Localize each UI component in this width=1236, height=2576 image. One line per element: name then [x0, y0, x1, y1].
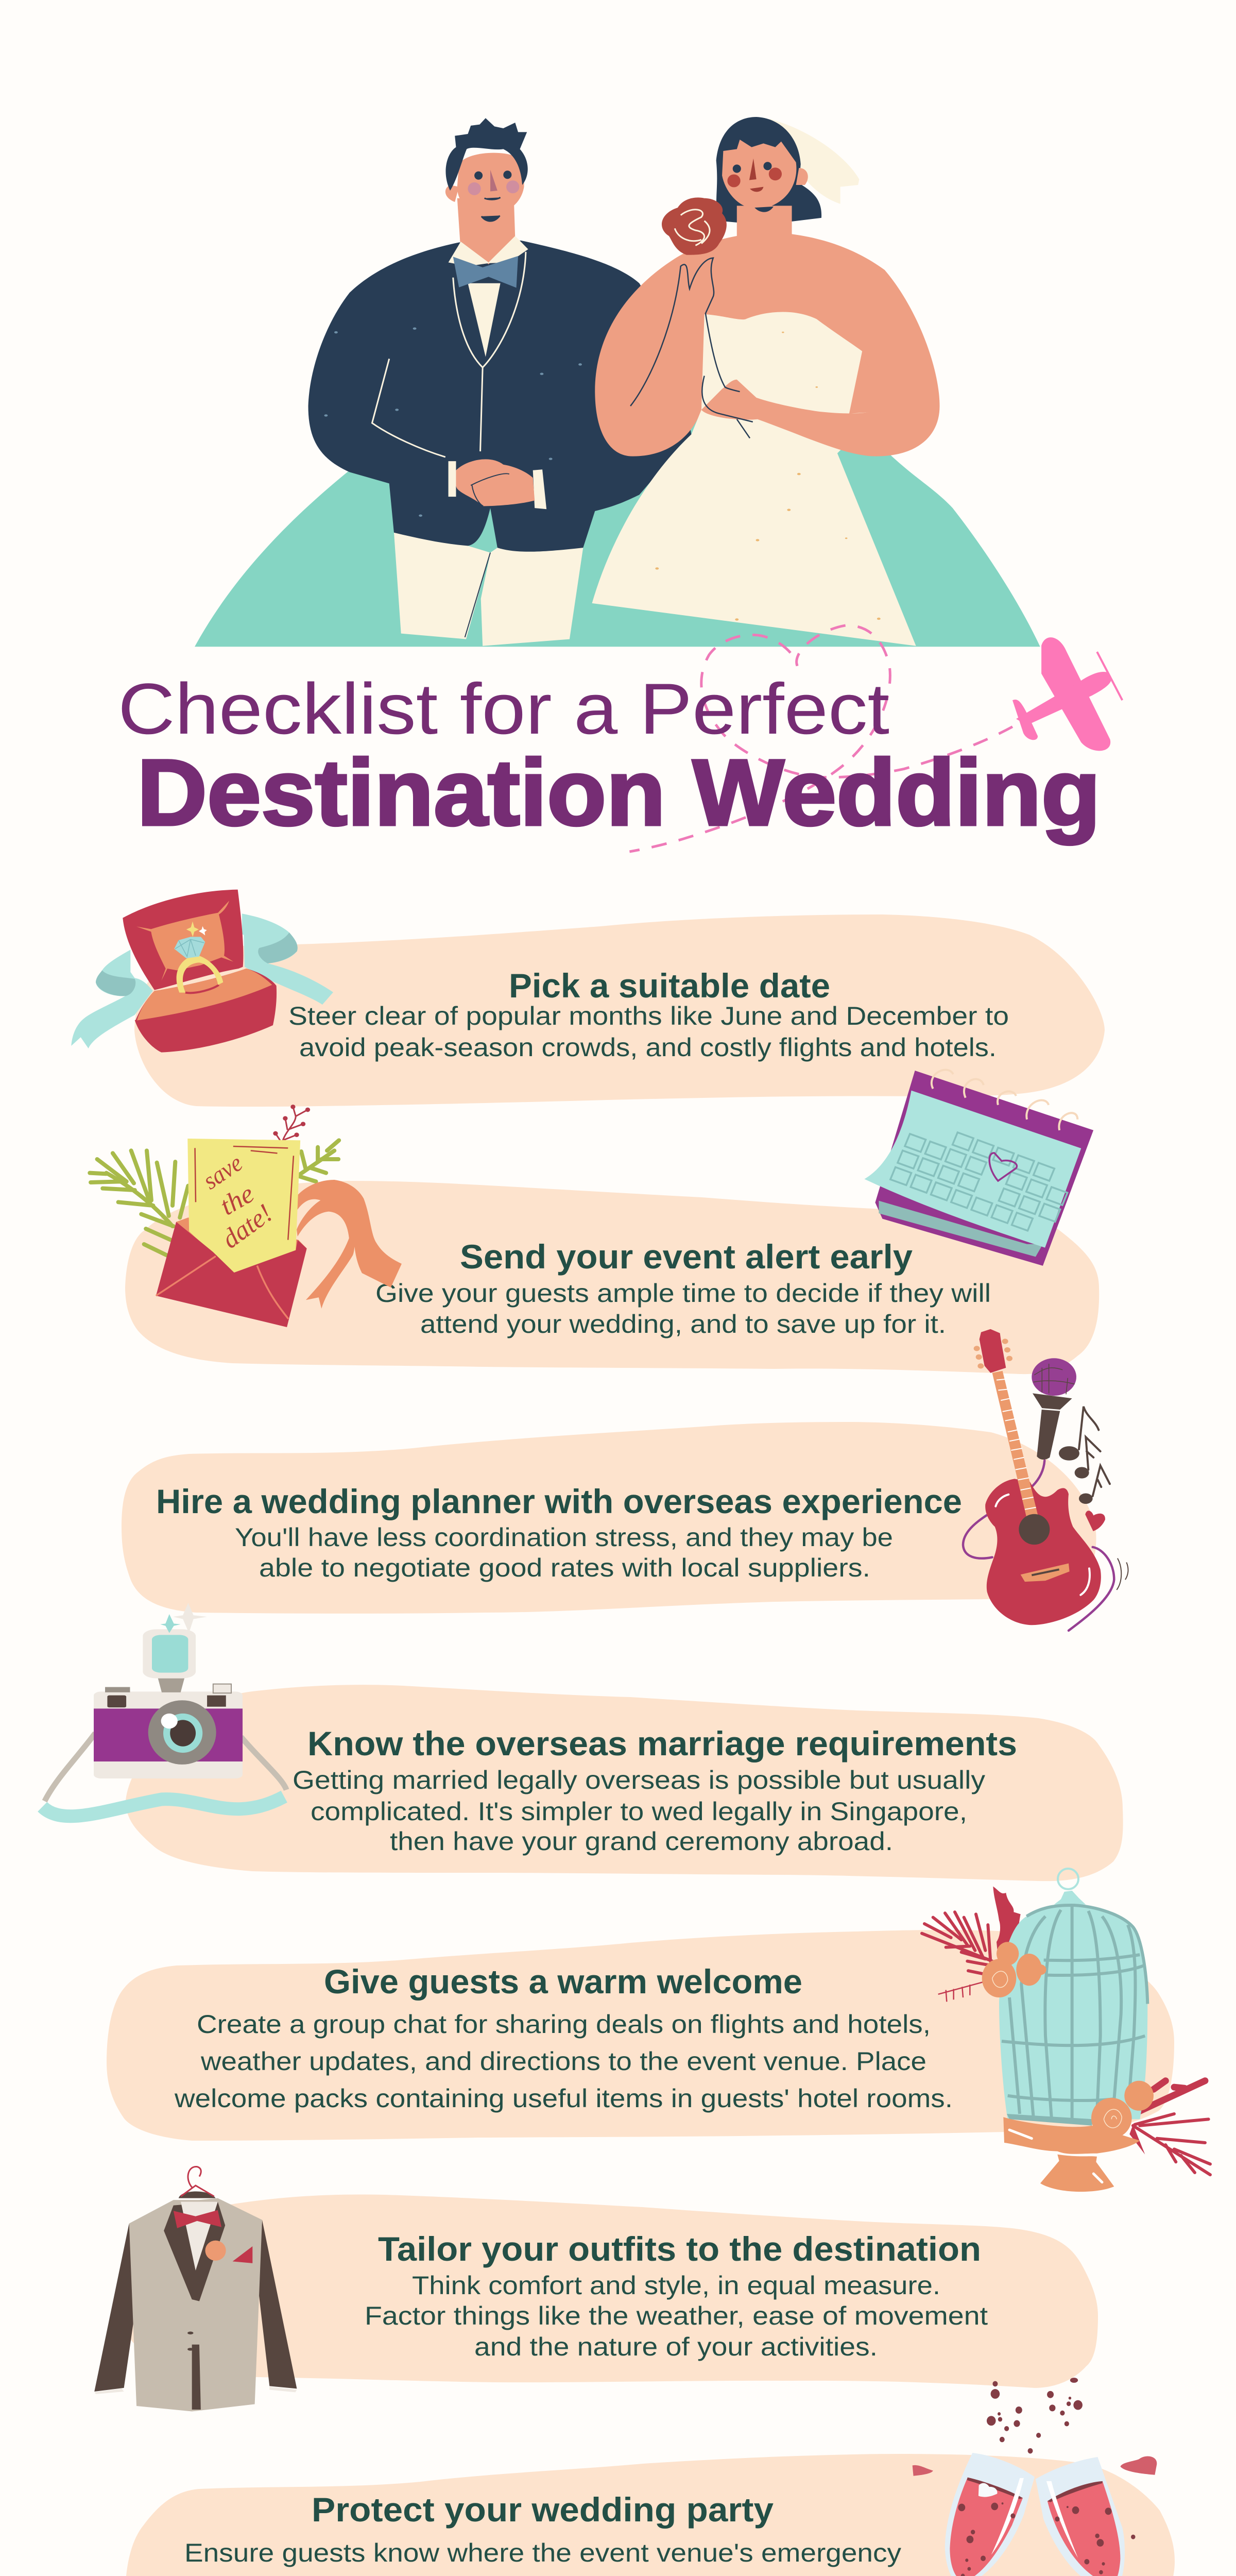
- save the date text: the: [215, 1179, 259, 1221]
- icon: birdcage: [922, 1869, 1210, 2192]
- panel: know the overseas marriage requirements: [126, 1685, 1123, 1881]
- panel: know the overseas marriage requirements: then have your grand ceremony abroad.: [390, 1827, 893, 1856]
- panel: pick a suitable date: avoid peak-season crowds, and costly flights and hotels.: [299, 1033, 997, 1062]
- icon: pink airplane: [1012, 637, 1122, 751]
- save the date text: save: [198, 1149, 247, 1195]
- panel: send your event alert early: attend your wedding, and to save up for it.: [420, 1310, 946, 1338]
- panel: hire a wedding planner: [122, 1422, 1096, 1614]
- panel: send your event alert early: Give your guests ample time to decide if they will: [375, 1279, 991, 1308]
- panel: give guests a warm welcome: [107, 1930, 1174, 2141]
- envelope: [156, 1222, 307, 1327]
- pedestal: [1003, 2117, 1140, 2154]
- save the date text: date!: [217, 1198, 278, 1255]
- illustration: bride and groom: [195, 117, 1040, 647]
- panel: protect your wedding party: Protect your wedding party: [312, 2490, 774, 2529]
- panel: pick a suitable date: Steer clear of popular months like June and December to: [288, 1002, 1009, 1030]
- panel: know the overseas marriage requirements: Getting married legally overseas is possible but usually: [293, 1766, 985, 1794]
- title line 2: Destination Wedding: [137, 740, 1101, 845]
- panel: know the overseas marriage requirements: Know the overseas marriage requirements: [307, 1724, 1017, 1762]
- panel: give guests a warm welcome: welcome packs containing useful items in guests' hotel rooms.: [174, 2084, 953, 2113]
- bride: [592, 117, 940, 646]
- left flute: [945, 2453, 1035, 2576]
- bubbles: [958, 2378, 1135, 2576]
- flowers: [982, 1942, 1154, 2139]
- icon: tuxedo jacket: [94, 2166, 297, 2412]
- panel: pick a suitable date: Pick a suitable date: [509, 967, 830, 1005]
- icon: calendar: [864, 1070, 1093, 1266]
- hill background: [195, 379, 1040, 647]
- icon: champagne glasses: [894, 2378, 1176, 2576]
- hearts: [913, 2456, 1157, 2576]
- panel: send your event alert early: Send your event alert early: [460, 1238, 913, 1276]
- panel: tailor your outfits: Tailor your outfits to the destination: [378, 2230, 981, 2268]
- panel: give guests a warm welcome: Create a group chat for sharing deals on flights and hotels,: [197, 2010, 931, 2039]
- panel: protect your wedding party: [125, 2454, 1175, 2576]
- panel: give guests a warm welcome: weather updates, and directions to the event venue. Place: [200, 2047, 926, 2076]
- icon: guitar and microphone: [963, 1329, 1128, 1631]
- note card: [187, 1139, 300, 1273]
- cage: [1058, 1869, 1078, 1889]
- ribbon: [297, 1180, 402, 1287]
- panel: tailor your outfits: and the nature of your activities.: [474, 2332, 878, 2361]
- panel: give guests a warm welcome: Give guests a warm welcome: [324, 1962, 802, 2001]
- panel: tailor your outfits: Factor things like the weather, ease of movement: [365, 2301, 988, 2330]
- title: [118, 668, 1101, 845]
- panel: hire a wedding planner: You'll have less coordination stress, and they may be: [235, 1523, 893, 1552]
- greenery: [90, 1150, 188, 1256]
- panel: send your event alert early: [125, 1181, 1099, 1374]
- dashed flight path with heart: [629, 625, 1012, 852]
- panel: pick a suitable date: [134, 914, 1105, 1107]
- panel: tailor your outfits: [128, 2195, 1098, 2388]
- panel: hire a wedding planner: able to negotiate good rates with local suppliers.: [259, 1553, 870, 1582]
- panel: hire a wedding planner: Hire a wedding planner with overseas experience: [156, 1482, 962, 1520]
- right flute: [1036, 2457, 1125, 2576]
- save the date text: [198, 1149, 278, 1255]
- title line 1: Checklist for a Perfect: [118, 668, 889, 749]
- icon: ring box: [71, 890, 333, 1053]
- icon: camera: [42, 1603, 286, 1816]
- red fronds: [922, 1912, 992, 1974]
- icon: save the date envelope: [90, 1105, 402, 1327]
- groom: [308, 118, 691, 646]
- panel: tailor your outfits: Think comfort and style, in equal measure.: [412, 2271, 940, 2300]
- panel: know the overseas marriage requirements: complicated. It's simpler to wed legally in Singapore,: [311, 1797, 967, 1826]
- panel: protect your wedding party: Ensure guests know where the event venue's emergency: [184, 2538, 901, 2567]
